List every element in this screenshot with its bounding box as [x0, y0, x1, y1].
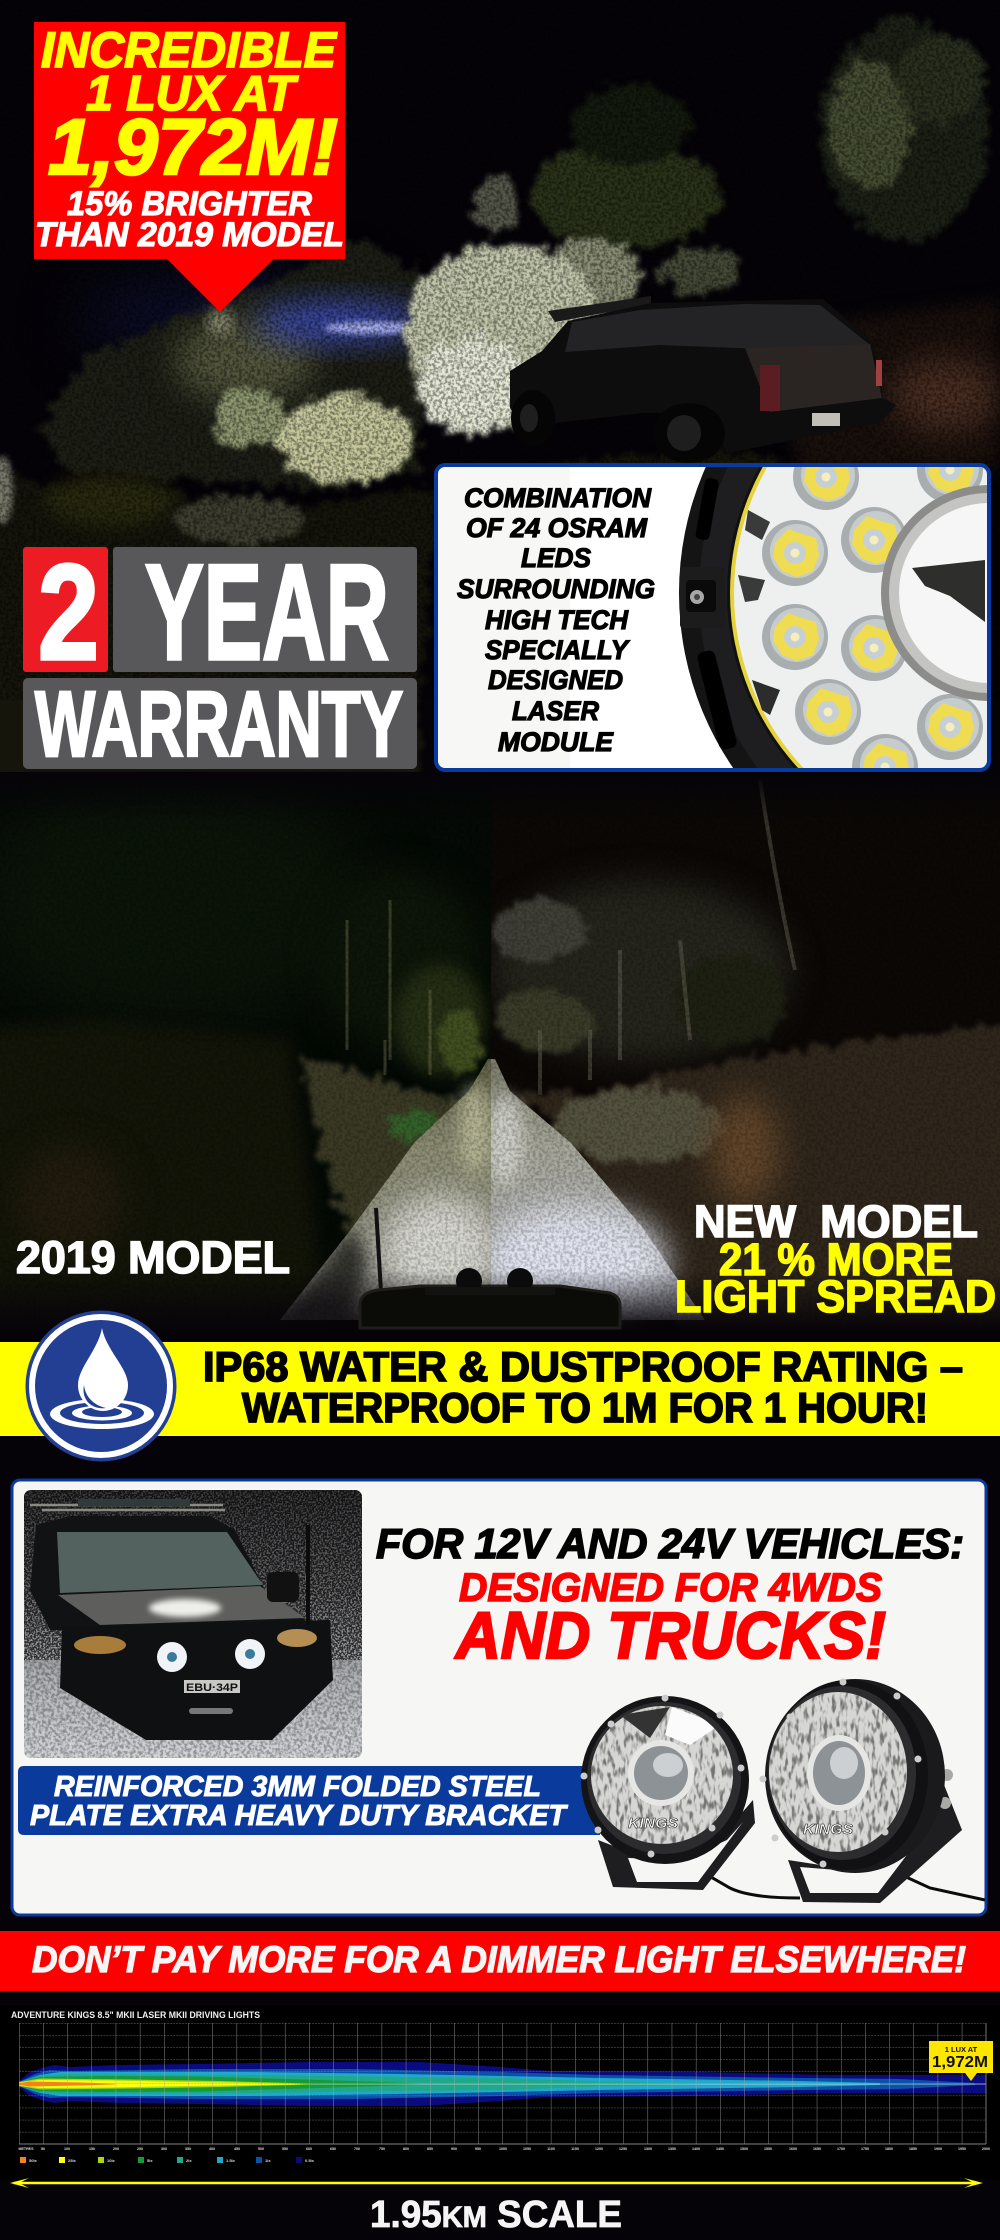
foreground vegetation — [0, 450, 800, 800]
axis labels: 1850 — [909, 2147, 917, 2151]
ute — [510, 296, 896, 463]
axis labels: 400 — [209, 2147, 215, 2151]
sky haze — [80, 275, 380, 365]
LED panel text: HIGH TECH — [485, 605, 628, 635]
axis labels: METRES — [19, 2147, 34, 2151]
arrow: scale — [10, 2178, 983, 2188]
beam target — [209, 311, 231, 333]
label: 2019 model: 2019 MODEL — [16, 1232, 290, 1283]
badge: 2 year warranty — [23, 536, 417, 776]
LED panel text: OF 24 OSRAM — [466, 513, 647, 543]
axis labels: 800 — [403, 2147, 409, 2151]
panel: 12V and 24V vehicles: REINFORCED 3MM FOLDED STEEL — [54, 1771, 541, 1803]
LED close-up photo — [570, 467, 987, 768]
axis labels: 1200 — [595, 2147, 603, 2151]
axis labels: 1700 — [837, 2147, 845, 2151]
headline: FOR 12V AND 24V VEHICLES: — [376, 1520, 964, 1567]
panel: 12V and 24V vehicles: PLATE EXTRA HEAVY DUTY BRACKET — [30, 1800, 568, 1832]
axis labels: 850 — [427, 2147, 433, 2151]
label: new model 21% more light spread: NEW MODEL — [694, 1196, 978, 1247]
grid — [19, 2023, 986, 2144]
label: new model 21% more light spread — [675, 1196, 996, 1322]
legend: 0.5lx — [305, 2158, 315, 2163]
callout: 1 lux at 1,972m — [34, 22, 345, 312]
callout: 1 lux at 1,972m: 1,972M! — [48, 102, 338, 191]
legend: 2lx — [186, 2158, 192, 2163]
legend — [20, 2157, 315, 2163]
bracket label bar — [18, 1766, 600, 1835]
axis labels: 950 — [475, 2147, 481, 2151]
banner: don't pay more — [0, 1931, 1000, 1991]
axis labels: 1150 — [571, 2147, 579, 2151]
panel: 12V and 24V vehicles: DESIGNED FOR 4WDS — [459, 1566, 882, 1610]
legend: 10lx — [107, 2158, 116, 2163]
legend: 50lx — [29, 2158, 38, 2163]
axis labels: 750 — [379, 2147, 385, 2151]
road texture and fade — [0, 772, 1000, 1490]
banner: IP68 rating: IP68 WATER & DUSTPROOF RATING – — [203, 1343, 963, 1390]
photo: forest road comparison, left half 2019 model — [0, 794, 491, 1320]
axis labels: 1250 — [619, 2147, 627, 2151]
badge: 2 year warranty: WARRANTY — [35, 672, 403, 776]
axis labels: 1450 — [716, 2147, 724, 2151]
callout: 1 lux at 1,972m: 15% BRIGHTER — [67, 185, 312, 223]
label: new model 21% more light spread: 21 % MORE — [719, 1234, 953, 1285]
panel: LED combination close-up — [434, 463, 991, 772]
label: new model 21% more light spread: LIGHT SPREAD — [675, 1271, 996, 1322]
legend: 25lx — [68, 2158, 77, 2163]
bright beam core — [324, 322, 420, 334]
legend: 1.5lx — [226, 2158, 236, 2163]
left driving light: KINGS — [628, 1815, 678, 1832]
axis labels: 1600 — [789, 2147, 797, 2151]
axis labels: 900 — [451, 2147, 457, 2151]
axis labels: 500 — [258, 2147, 264, 2151]
right driving light: KINGS — [803, 1821, 853, 1838]
badge: 2 year warranty: YEAR — [145, 536, 389, 688]
axis labels: 1100 — [547, 2147, 555, 2151]
axis labels: 1050 — [523, 2147, 531, 2151]
badge: 2 year warranty: 2 — [38, 536, 99, 688]
banner: don't pay more: DON’T PAY MORE FOR A DIMMER LIGHT ELSEWHERE! — [32, 1939, 966, 1980]
callout: 1 lux at 1,972m: 1 LUX AT — [86, 67, 299, 121]
LED panel text: MODULE — [498, 727, 614, 757]
ground — [760, 300, 1000, 470]
axis labels: 700 — [354, 2147, 360, 2151]
banner: IP68 rating: WATERPROOF TO 1M FOR 1 HOUR! — [242, 1384, 928, 1431]
photo: night hillside with ute — [0, 0, 1000, 800]
axis labels: 1900 — [934, 2147, 942, 2151]
LED panel text — [457, 483, 655, 757]
LED panel text: DESIGNED — [488, 665, 623, 695]
axis labels: 150 — [89, 2147, 95, 2151]
right driving light — [760, 1678, 962, 1903]
photo: 4WD driving through water — [24, 1490, 362, 1758]
axis labels: 250 — [137, 2147, 143, 2151]
axis labels: 1950 — [958, 2147, 966, 2151]
callout: 1 lux at 1,972m: 1 LUX AT — [945, 2045, 978, 2054]
panel: 12V and 24V vehicles: AND TRUCKS! — [454, 1598, 886, 1672]
rear trees — [473, 20, 990, 292]
legend: 5lx — [147, 2158, 153, 2163]
legend: 1lx — [265, 2158, 271, 2163]
left driving light — [580, 1694, 755, 1890]
LED panel text: LASER — [512, 696, 599, 726]
photo: 4WD driving through water: EBU·34P — [186, 1682, 238, 1694]
callout: 1 lux at 1,972m: THAN 2019 MODEL — [35, 216, 344, 254]
photo: forest road comparison, right half new model — [491, 780, 1000, 1322]
bright lit tree — [214, 239, 640, 484]
axis labels: 450 — [234, 2147, 240, 2151]
callout: 1 lux at 1,972m — [929, 2041, 993, 2081]
axis labels: 1500 — [740, 2147, 748, 2151]
beam bands — [19, 2062, 986, 2106]
axis labels: 1800 — [885, 2147, 893, 2151]
LED panel text: SPECIALLY — [485, 635, 631, 665]
banner: IP68 rating — [0, 1342, 1000, 1436]
axis labels: 1650 — [813, 2147, 821, 2151]
axis labels: 650 — [330, 2147, 336, 2151]
axis labels: 50 — [41, 2147, 45, 2151]
panel: 12V and 24V vehicles — [12, 1480, 986, 1915]
axis labels: 1000 — [499, 2147, 507, 2151]
hillside — [40, 239, 420, 490]
icon: water drop — [26, 1310, 176, 1462]
chart title: ADVENTURE KINGS 8.5" MKII LASER MKII DRIVING LIGHTS — [11, 2010, 260, 2020]
axis labels: 1400 — [692, 2147, 700, 2151]
blue beam glow — [255, 302, 425, 342]
axis labels: 100 — [64, 2147, 70, 2151]
callout: 1 lux at 1,972m: INCREDIBLE — [41, 22, 338, 78]
axis labels: 600 — [306, 2147, 312, 2151]
axis labels: 200 — [113, 2147, 119, 2151]
axis labels: 2000 — [982, 2147, 990, 2151]
LED panel text: LEDS — [521, 543, 591, 573]
axis labels: 350 — [185, 2147, 191, 2151]
power cables — [685, 1862, 985, 1900]
axis labels: 1350 — [668, 2147, 676, 2151]
axis labels: 1750 — [861, 2147, 869, 2151]
LED panel text: SURROUNDING — [457, 574, 655, 604]
axis labels: 1550 — [764, 2147, 772, 2151]
callout: 1 lux at 1,972m: 1,972M — [932, 2054, 988, 2071]
axis labels: 1300 — [644, 2147, 652, 2151]
scale label: 1.95KM SCALE — [370, 2194, 622, 2236]
axis labels: 300 — [161, 2147, 167, 2151]
chart: beam pattern — [0, 2005, 1000, 2180]
vehicle silhouette with bullbar — [360, 1208, 620, 1328]
LED panel text: COMBINATION — [464, 483, 651, 513]
lit hill — [175, 318, 315, 402]
axis labels: 550 — [282, 2147, 288, 2151]
